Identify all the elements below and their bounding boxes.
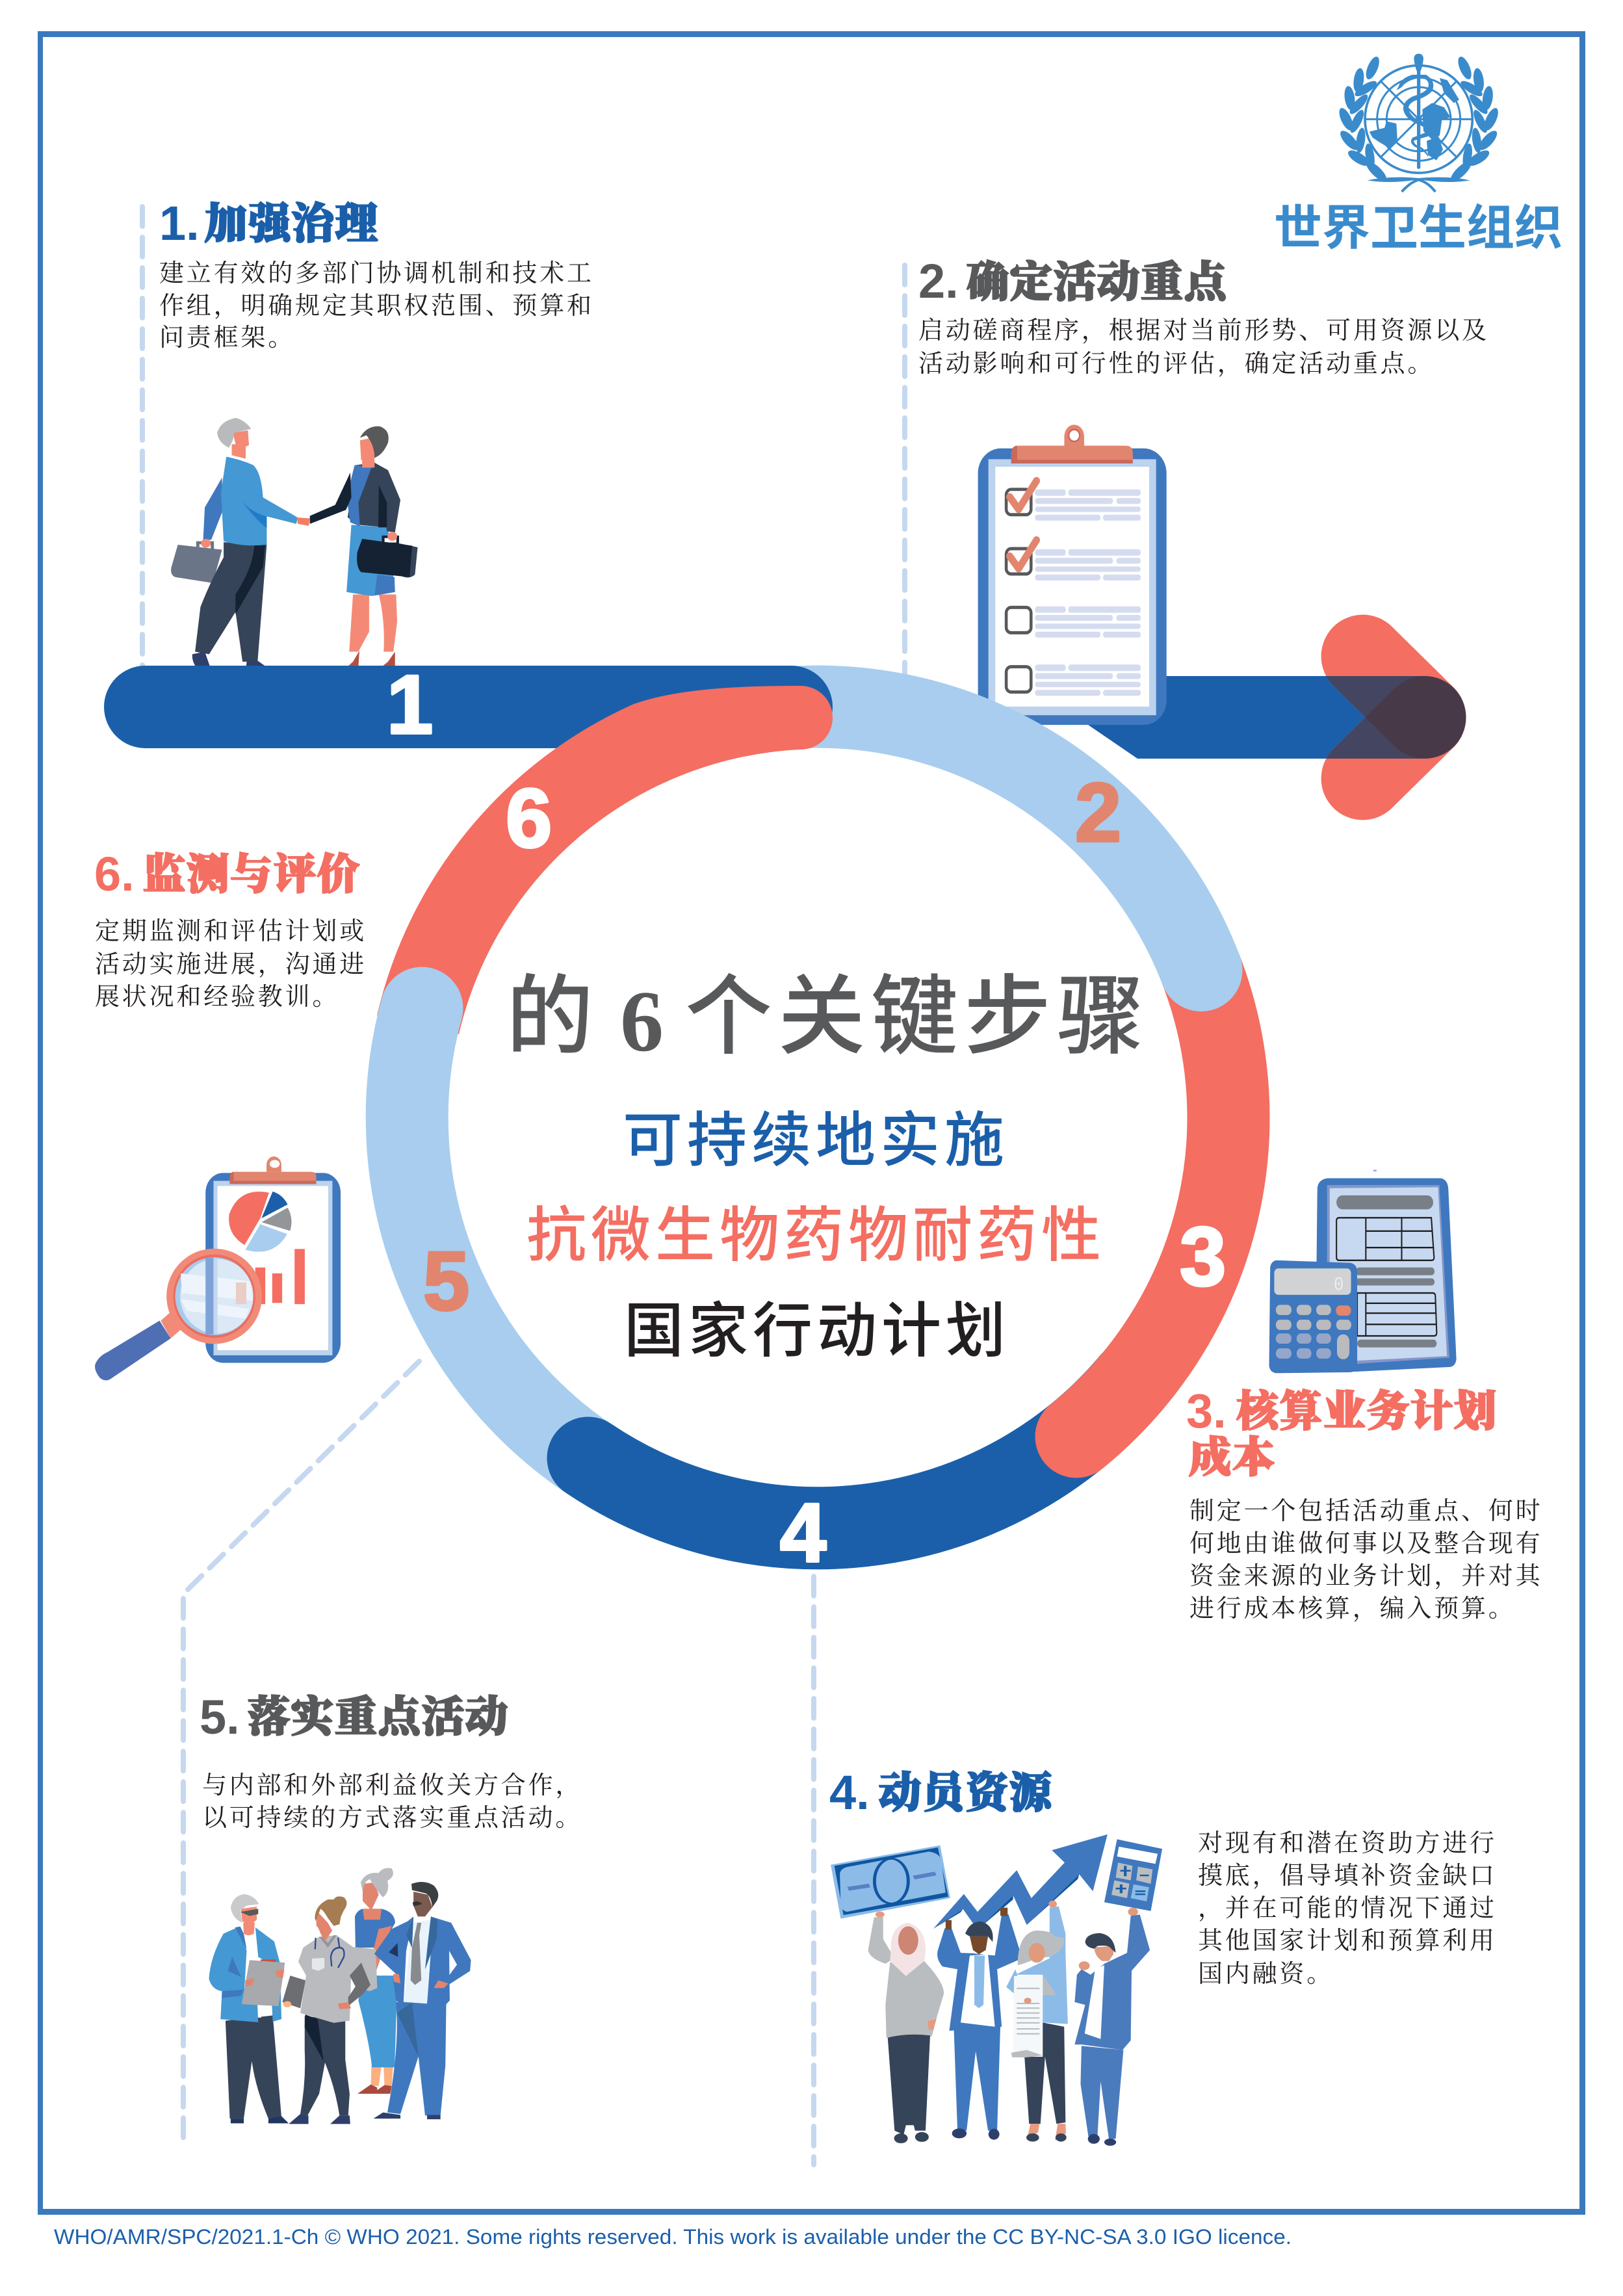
- step 1 dashed leader: [140, 207, 145, 666]
- ring segment 4: [588, 1381, 1132, 1528]
- step 2 heading: 确定活动重点: [967, 259, 1230, 306]
- step 1 heading: 1.: [159, 196, 200, 250]
- title line 1: 的: [506, 946, 593, 1072]
- footer credit: WHO/AMR/SPC/2021.1-Ch © WHO 2021. Some rights reserved. This work is available under the CC BY-NC-SA 3.0 IGO licence.: [54, 2225, 1292, 2249]
- step 3 text: 制定一个包括活动重点、何时: [1189, 1491, 1542, 1526]
- ring segment 5: [407, 1008, 644, 1490]
- step 5 text: 以可持续的方式落实重点活动。: [202, 1797, 582, 1833]
- step 6 text: 活动实施进展，沟通进: [95, 944, 367, 980]
- step 6 text: [95, 911, 367, 1012]
- step 6 text: 定期监测和评估计划或: [95, 911, 367, 946]
- step 5 heading: 落实重点活动: [248, 1694, 509, 1741]
- title line 3: 抗微生物药物耐药性: [526, 1187, 1106, 1273]
- central ring with six segments: [104, 666, 1243, 1528]
- step 2 text: [918, 310, 1489, 379]
- step 4 text: ，并在可能的情况下通过: [1198, 1888, 1497, 1924]
- step 3 heading: 3.: [1186, 1384, 1227, 1438]
- step 5 dashed leader: [183, 1361, 419, 2145]
- step 3 text: 进行成本核算，编入预算。: [1189, 1588, 1516, 1624]
- ring segment 2: [796, 707, 1201, 970]
- illustration: report and magnifier: [95, 1156, 341, 1380]
- title line 1: 个关键步骤: [685, 946, 1150, 1072]
- step 4 text: 摸底，倡导填补资金缺口: [1198, 1855, 1497, 1891]
- step 1 text: [159, 253, 594, 353]
- step 6 heading: 6.: [94, 847, 135, 901]
- illustration: calculator and budget sheet: 0: [1334, 1275, 1344, 1296]
- step 3 text: 何地由谁做何事以及整合现有: [1189, 1523, 1542, 1559]
- WHO name: 世界卫生组织: [1274, 189, 1563, 259]
- step 4 text: 国内融资。: [1198, 1953, 1334, 1989]
- top bar, step 1: [104, 666, 833, 748]
- step 4 heading: [829, 1766, 1055, 1820]
- step 1 text: 作组，明确规定其职权范围、预算和: [159, 285, 594, 321]
- ring segment 2 end cap: [1160, 929, 1243, 1011]
- illustration: handshake: [171, 418, 418, 670]
- step numerals: [387, 659, 1226, 1580]
- centre title: [506, 946, 1150, 1369]
- WHO emblem: [1336, 54, 1501, 192]
- step 6 text: 展状况和经验教训。: [95, 976, 339, 1012]
- step numerals: 1: [387, 659, 433, 751]
- step numerals: 3: [1180, 1210, 1226, 1303]
- illustration: calculator and budget sheet: [1269, 1170, 1457, 1373]
- step 2 text: 启动磋商程序，根据对当前形势、可用资源以及: [918, 310, 1489, 346]
- step 4 heading: 4.: [829, 1766, 870, 1820]
- step 2 dashed leader: [902, 265, 907, 689]
- illustration: team of four: [209, 1868, 471, 2124]
- step 4 text: 其他国家计划和预算利用: [1198, 1920, 1497, 1956]
- illustration: checklist clipboard: [978, 424, 1167, 725]
- ring segment 3: [1076, 970, 1228, 1437]
- step 3 heading: 成本: [1189, 1435, 1276, 1481]
- title line 4: 国家行动计划: [624, 1283, 1010, 1369]
- step 6 heading: 监测与评价: [143, 852, 361, 898]
- step numerals: 2: [1075, 766, 1121, 859]
- step numerals: 6: [506, 772, 552, 865]
- ring segment 6: [377, 686, 833, 1034]
- arrow bar with chevron head: [1088, 615, 1466, 820]
- step 1 text: 建立有效的多部门协调机制和技术工: [159, 253, 594, 289]
- step 4 text: [1198, 1823, 1497, 1989]
- ring segment 3 end cap: [1035, 1395, 1118, 1478]
- step 2 text: 活动影响和可行性的评估，确定活动重点。: [918, 343, 1435, 379]
- step 4 dashed leader: [811, 1576, 816, 2165]
- step 5 text: 与内部和外部利益攸关方合作，: [202, 1765, 582, 1801]
- step 4 text: 对现有和潜在资助方进行: [1198, 1823, 1497, 1859]
- title line 1: 6: [620, 973, 664, 1069]
- illustration: people lifting money, growth arrow and calculator: [831, 1834, 1162, 2146]
- step 3 heading: [1186, 1384, 1498, 1481]
- step 2 heading: 2.: [918, 254, 959, 308]
- step numerals: 4: [780, 1487, 826, 1580]
- step 3 heading: 核算业务计划: [1236, 1389, 1498, 1435]
- step 3 text: 资金来源的业务计划，并对其: [1189, 1556, 1542, 1591]
- title line 2: 可持续地实施: [623, 1092, 1009, 1179]
- step numerals: 5: [423, 1235, 469, 1328]
- step 1 heading: 加强治理: [205, 201, 379, 248]
- step 5 text: [202, 1765, 582, 1833]
- step 3 text: [1189, 1491, 1542, 1624]
- step 5 heading: 5.: [200, 1690, 240, 1744]
- step 1 text: 问责框架。: [159, 317, 295, 353]
- step 1 heading: [159, 196, 379, 250]
- step 4 heading: 动员资源: [879, 1770, 1055, 1817]
